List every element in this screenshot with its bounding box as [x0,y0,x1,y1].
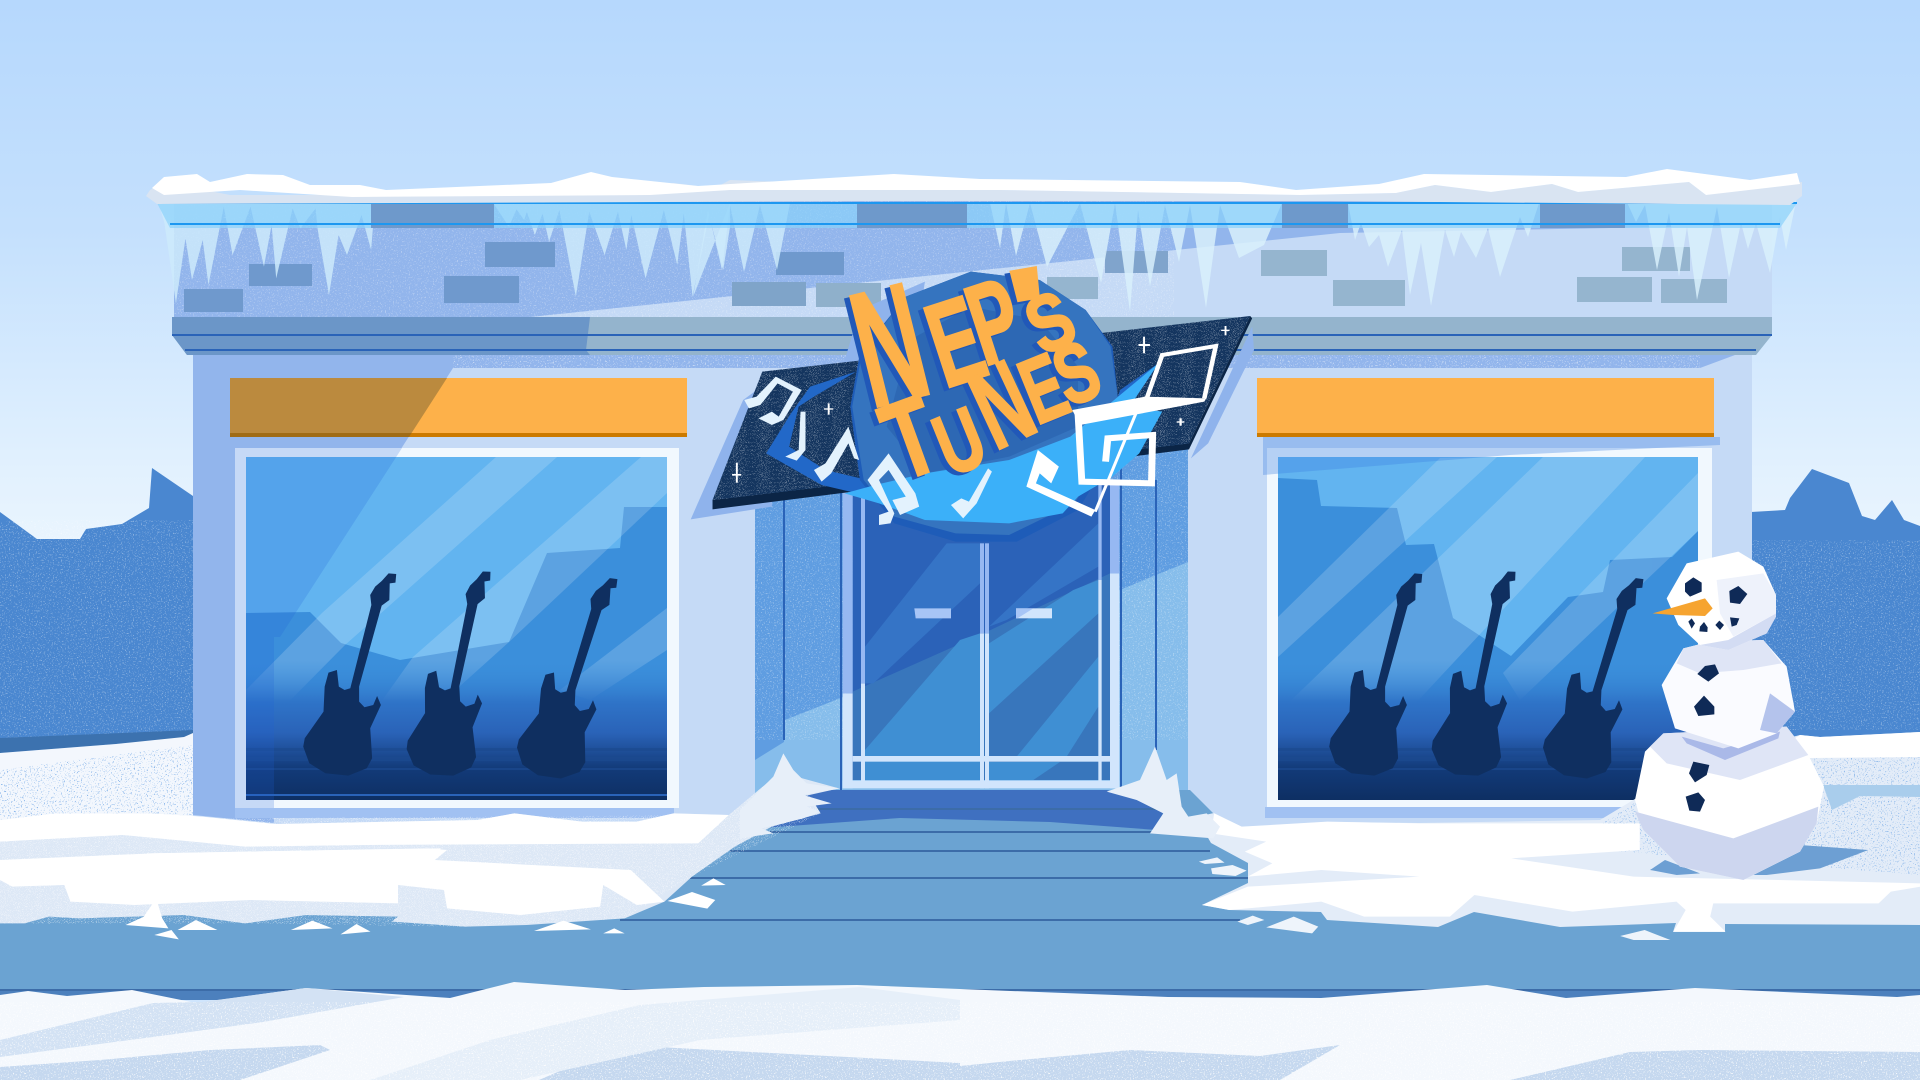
snow grain [0,1002,1920,1080]
ice chips [154,878,726,939]
icicle cluster 1 [159,203,375,303]
wordmark TUNES: N [952,337,1052,474]
ice chips [1199,857,1670,940]
roof wall [174,200,1772,320]
wordmark TUNES: S [1040,322,1113,424]
head [1667,552,1776,650]
shop window left [235,448,679,808]
guitars right [1329,571,1643,781]
vestibule [755,440,1188,795]
icicle cluster 2 [494,203,730,297]
wordmark NEP'S [836,241,1089,443]
white drift top [0,813,729,847]
snowman [1635,552,1868,880]
snow piles at door [740,747,1220,838]
far right white strip [1780,732,1920,758]
wordmark NEP'S: P [952,253,1037,390]
icicle cluster 5 [1348,200,1540,306]
logo letters [836,241,1113,505]
wordmark NEP'S: S [1012,273,1089,372]
wordmark NEP'S: ' [998,241,1063,380]
bricks left [184,242,881,312]
wordmark TUNES [867,322,1113,505]
wordmark NEP'S: N [836,248,944,443]
middle ball [1662,640,1795,748]
sky background [0,0,1920,760]
snow underside [146,180,1802,205]
gutter dark segments [371,203,1625,228]
icicle cluster 4 [990,203,1282,312]
white drift front [0,848,664,915]
big clef note [1026,346,1216,517]
bricks right [1047,247,1727,306]
gutter lines [157,202,1797,225]
gutter glass [157,203,1797,228]
face and buttons [1685,577,1747,812]
snow shade bands [0,987,1920,1080]
snow cap [152,169,1800,197]
wordmark NEP'S: E [912,271,1000,414]
foreground snow [0,982,1920,1080]
wordmark TUNES: E [1006,334,1081,444]
under-cornice shadow [193,355,1735,823]
stars [732,326,1230,483]
carrot nose [1653,598,1713,616]
glass stripes [865,523,1098,683]
door handles [914,608,1052,618]
sign [691,241,1254,542]
snow right of door [1196,732,1920,940]
planet ring back [766,372,871,497]
back snow [0,733,193,825]
white drift [1202,813,1920,932]
right window shadow strip [1263,437,1720,475]
icicles and gutter [157,197,1797,312]
icicle cluster 3 [693,203,790,297]
door glass [853,480,1110,780]
window shadow [235,448,402,808]
sign shadow [691,282,1254,519]
door frame [843,573,1119,788]
wordmark TUNES: T [867,373,954,505]
storefront door [755,440,1188,795]
building wall [193,350,1752,830]
sign panel [713,316,1252,509]
door step shadow [762,790,1163,830]
distant mountains [0,468,1920,753]
planet ring front [845,363,1162,523]
roof wall shadow [174,200,1772,317]
wordmark TUNES: U [921,388,998,494]
bank base [0,755,839,927]
snowman shadow [1650,845,1868,875]
bottom ball [1635,727,1824,880]
music notes [744,377,992,525]
shop window right [1267,448,1712,807]
orange sign band left [230,378,687,437]
roof snow [146,169,1802,205]
road [0,790,1920,1000]
road plank lines [620,808,1250,921]
cornice [172,317,1772,355]
snow left of door [0,733,839,939]
far right shadow [1823,785,1920,810]
guitars left [303,571,617,781]
orange sign band right [1257,378,1714,437]
globe [850,272,1118,542]
mid drift [147,848,441,867]
building [172,200,1772,830]
icicle cluster 6 [1625,197,1797,300]
